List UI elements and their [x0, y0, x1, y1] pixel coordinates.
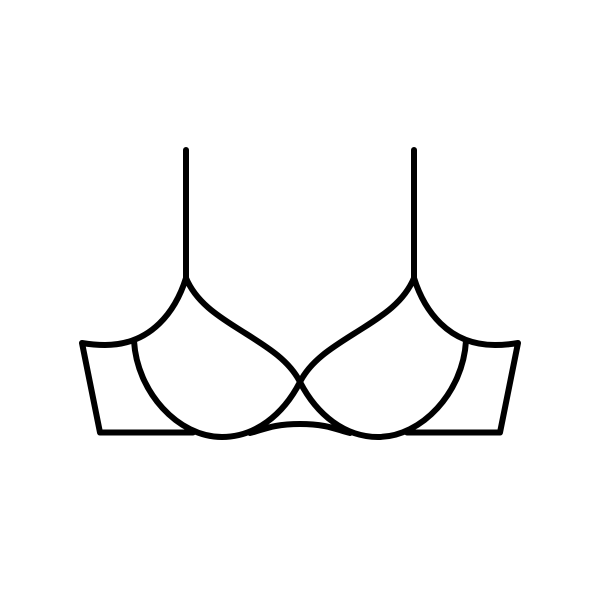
- left outer edge and side band: [82, 278, 193, 432]
- left cup top crossing into right underwire: [186, 278, 466, 437]
- center bridge: [250, 424, 350, 433]
- right cup top crossing into left underwire: [134, 278, 414, 437]
- right strap: [411, 150, 417, 278]
- right outer edge and side band: [407, 278, 518, 432]
- left strap: [183, 150, 189, 278]
